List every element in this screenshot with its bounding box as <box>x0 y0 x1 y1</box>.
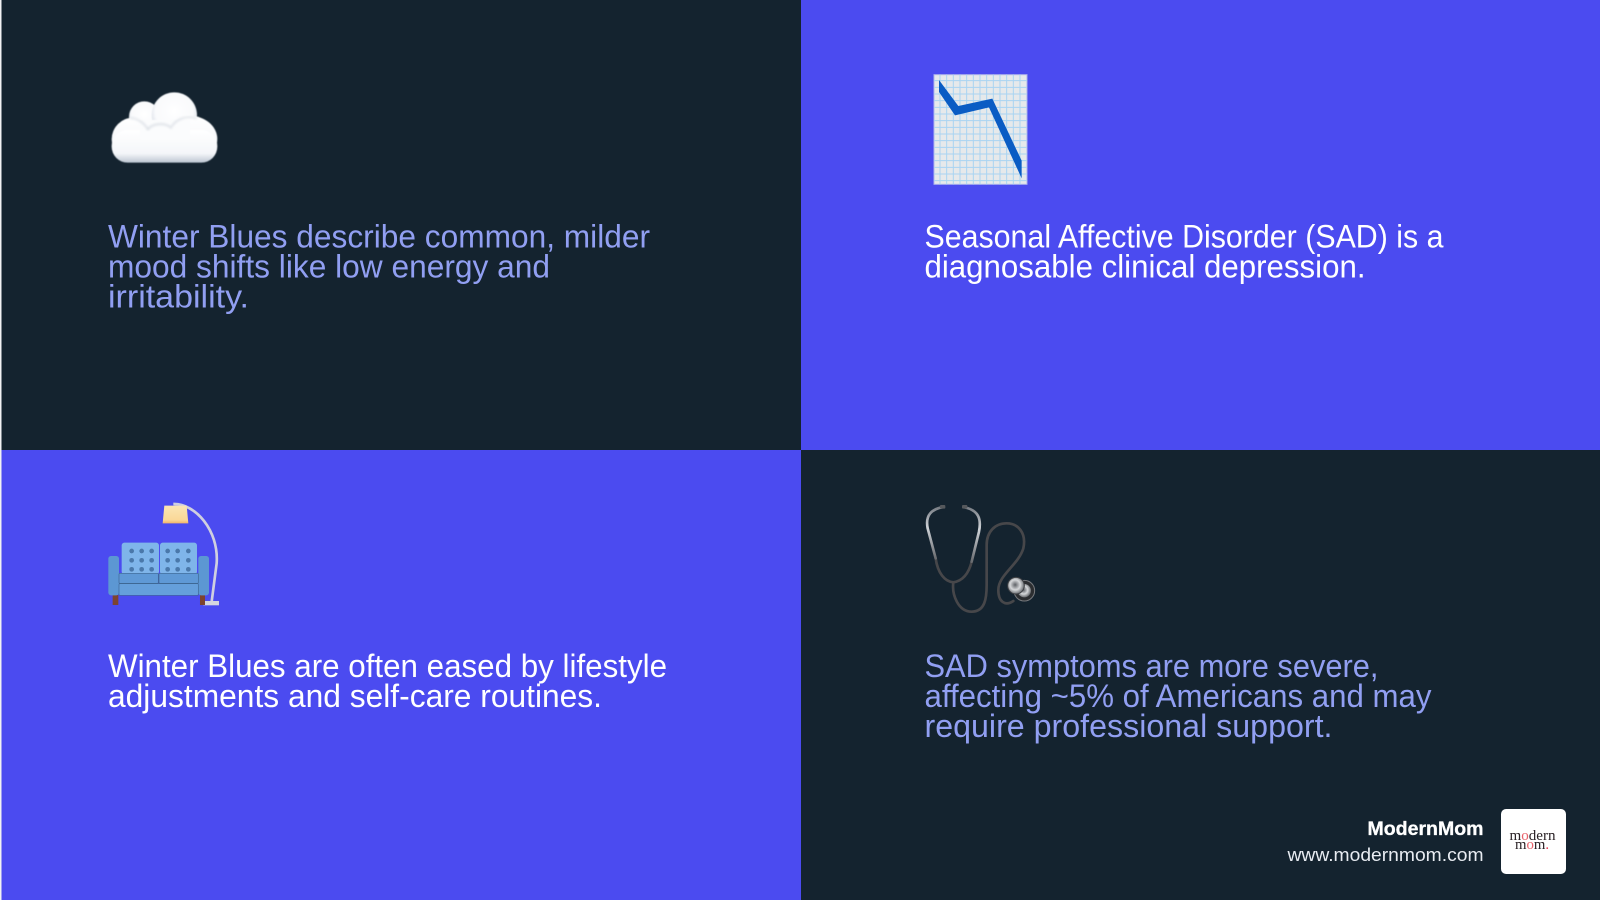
icon: cloud <box>112 92 217 163</box>
panel: winter blues description <box>2 0 801 450</box>
text: SAD severity: SAD symptoms are more severe, <box>924 648 1378 684</box>
icon: couch and lamp <box>108 504 219 605</box>
icon: stethoscope <box>927 505 1035 612</box>
text: SAD severity: require professional support. <box>924 708 1332 744</box>
text: winter blues definition: irritability. <box>108 278 249 314</box>
panel: winter blues relief <box>2 450 801 900</box>
text: winter blues definition: mood shifts like low energy and <box>108 248 550 284</box>
text: SAD definition: Seasonal Affective Disorder (SAD) is a <box>924 218 1444 254</box>
text: SAD definition: diagnosable clinical depression. <box>924 248 1366 284</box>
brand url: www.modernmom.com <box>1286 845 1484 865</box>
brand logo: modern <box>1510 828 1556 844</box>
footer: brand block <box>1286 809 1566 874</box>
brand logo: mom. <box>1515 837 1549 853</box>
panel: SAD description <box>801 0 1600 450</box>
panel: SAD severity <box>801 450 1600 900</box>
text: SAD severity: affecting ~5% of Americans and may <box>924 678 1432 714</box>
brand logo <box>1501 809 1566 874</box>
text: winter blues relief: Winter Blues are often eased by lifestyle <box>108 648 667 684</box>
text: winter blues definition: Winter Blues describe common, milder <box>108 218 650 254</box>
text: winter blues relief: adjustments and self-care routines. <box>108 678 602 714</box>
brand name: ModernMom <box>1368 819 1484 840</box>
icon: chart decreasing <box>934 75 1027 184</box>
